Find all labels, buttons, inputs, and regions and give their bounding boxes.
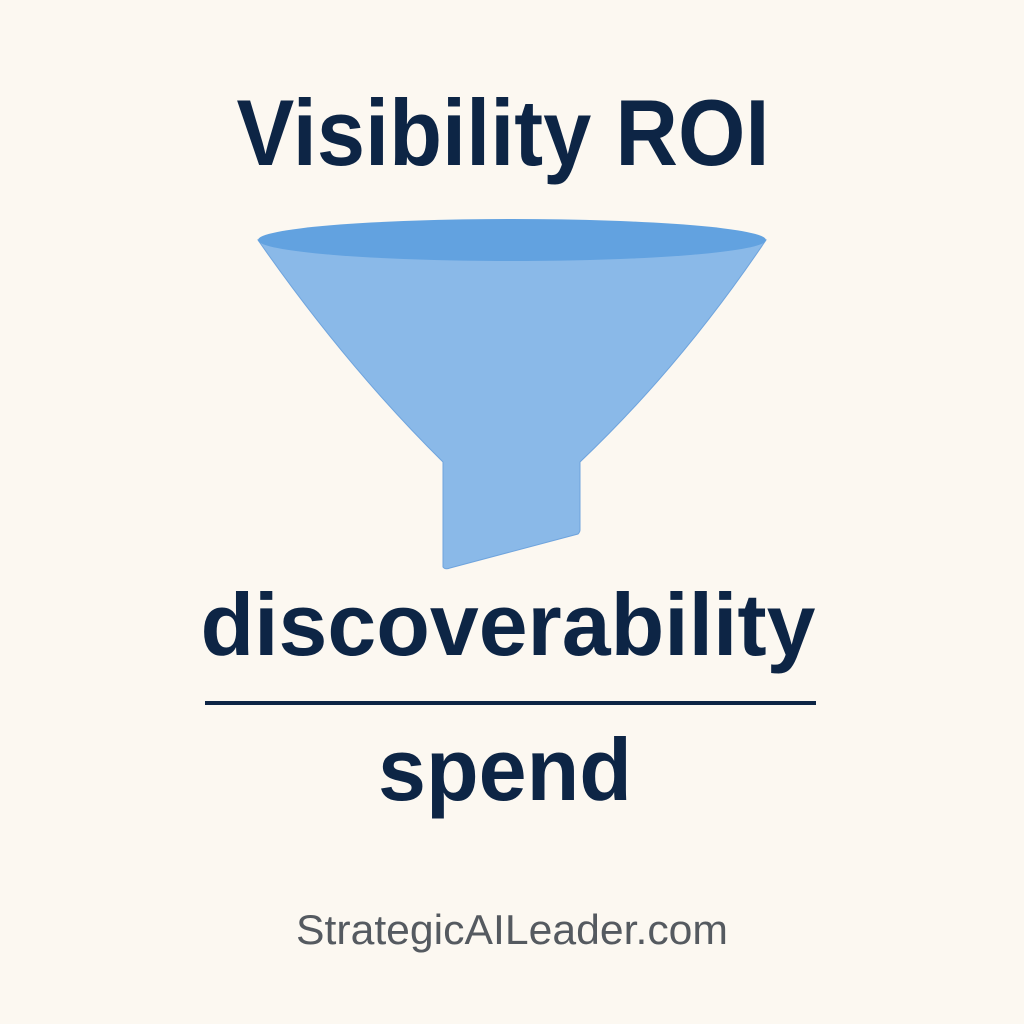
- fraction line: [205, 701, 816, 705]
- icon: funnel: [258, 219, 766, 569]
- numerator text: discoverability: [200, 575, 816, 674]
- title: Visibility ROI: [236, 80, 770, 185]
- footer website: StrategicAILeader.com: [296, 906, 728, 953]
- denominator text: spend: [378, 720, 632, 819]
